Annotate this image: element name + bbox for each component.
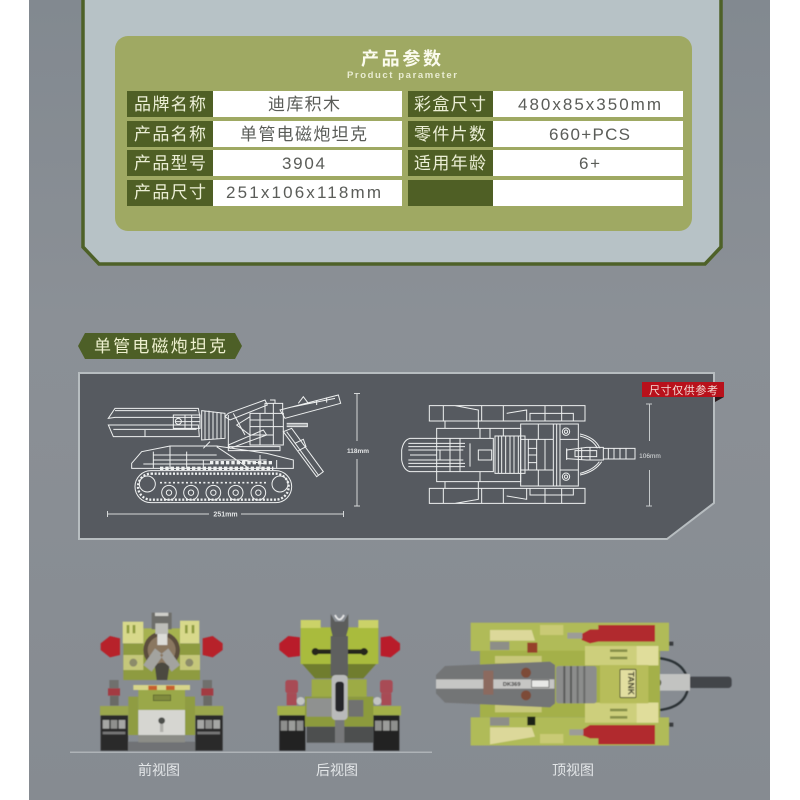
table: parameters: 产品名称 — [134, 125, 206, 144]
line drawing: tank side view — [108, 395, 341, 503]
table: parameters: 适用年龄 — [414, 154, 486, 173]
red side pods — [101, 636, 223, 657]
tracks and hull — [471, 623, 669, 746]
table: parameters: 6+ — [579, 154, 600, 173]
caption: rear view: 后视图 — [316, 762, 358, 778]
photo: rear view tank — [277, 614, 401, 751]
small figures — [108, 680, 213, 706]
badge: size for reference only: 尺寸仅供参考 — [649, 383, 718, 397]
table: parameters: 零件片数 — [414, 125, 486, 144]
line drawing: tank top view — [402, 406, 635, 503]
gun column — [331, 614, 348, 743]
table: parameters: 660+PCS — [549, 125, 630, 144]
dimension: length 251mm: 251mm — [213, 512, 238, 518]
panel: product parameter card — [83, 0, 721, 264]
table: parameters — [127, 91, 683, 206]
red side sections — [567, 625, 655, 744]
badge: size for reference only — [642, 382, 724, 402]
main barrel — [436, 656, 597, 712]
dimension: length 251mm — [108, 511, 344, 518]
table: parameters: 单管电磁炮坦克 — [240, 125, 367, 144]
heading: product parameter: 产品参数 — [361, 48, 441, 69]
table: parameters: 3904 — [282, 154, 325, 173]
photo: front view tank — [100, 613, 223, 751]
table: parameters: 迪库积木 — [268, 95, 340, 114]
left track — [277, 706, 307, 751]
rear gun — [648, 642, 732, 727]
floor line — [70, 752, 432, 753]
turret deck — [585, 646, 658, 723]
panel: dimension drawings — [79, 373, 714, 539]
table: parameters: 品牌名称 — [134, 95, 206, 114]
hull rear — [305, 679, 373, 743]
dimension: height 118mm: 118mm — [347, 448, 369, 455]
caption: front view: 前视图 — [138, 762, 180, 778]
photo: top view tank — [436, 623, 732, 746]
table: parameters: 480x85x350mm — [518, 95, 661, 114]
left track — [100, 706, 128, 751]
dimension: width 106mm: 106mm — [639, 453, 661, 460]
main barrel: DK369 — [503, 682, 520, 688]
right track — [372, 706, 401, 751]
table: parameters: 产品型号 — [134, 154, 206, 173]
table: parameters: 产品尺寸 — [134, 183, 206, 202]
turret rear — [301, 620, 378, 678]
panel: green parameter block — [115, 36, 692, 231]
turret — [123, 613, 200, 680]
table: parameters: 251x106x118mm — [226, 183, 381, 202]
red side pods — [279, 636, 400, 657]
small red figures — [285, 680, 393, 705]
hull — [133, 685, 190, 742]
heading: product parameter — [347, 48, 457, 81]
dimension: height 118mm — [347, 394, 369, 506]
section tag: single-barrel railgun tank: 单管电磁炮坦克 — [94, 337, 226, 356]
table: parameters: 彩盒尺寸 — [414, 95, 486, 114]
turret deck: TANK — [626, 672, 636, 696]
caption: top view: 顶视图 — [552, 762, 594, 778]
section tag: single-barrel railgun tank — [78, 333, 242, 359]
right track — [195, 706, 223, 751]
dimension: width 106mm — [639, 404, 661, 506]
heading: product parameter: Product parameter — [347, 70, 457, 81]
